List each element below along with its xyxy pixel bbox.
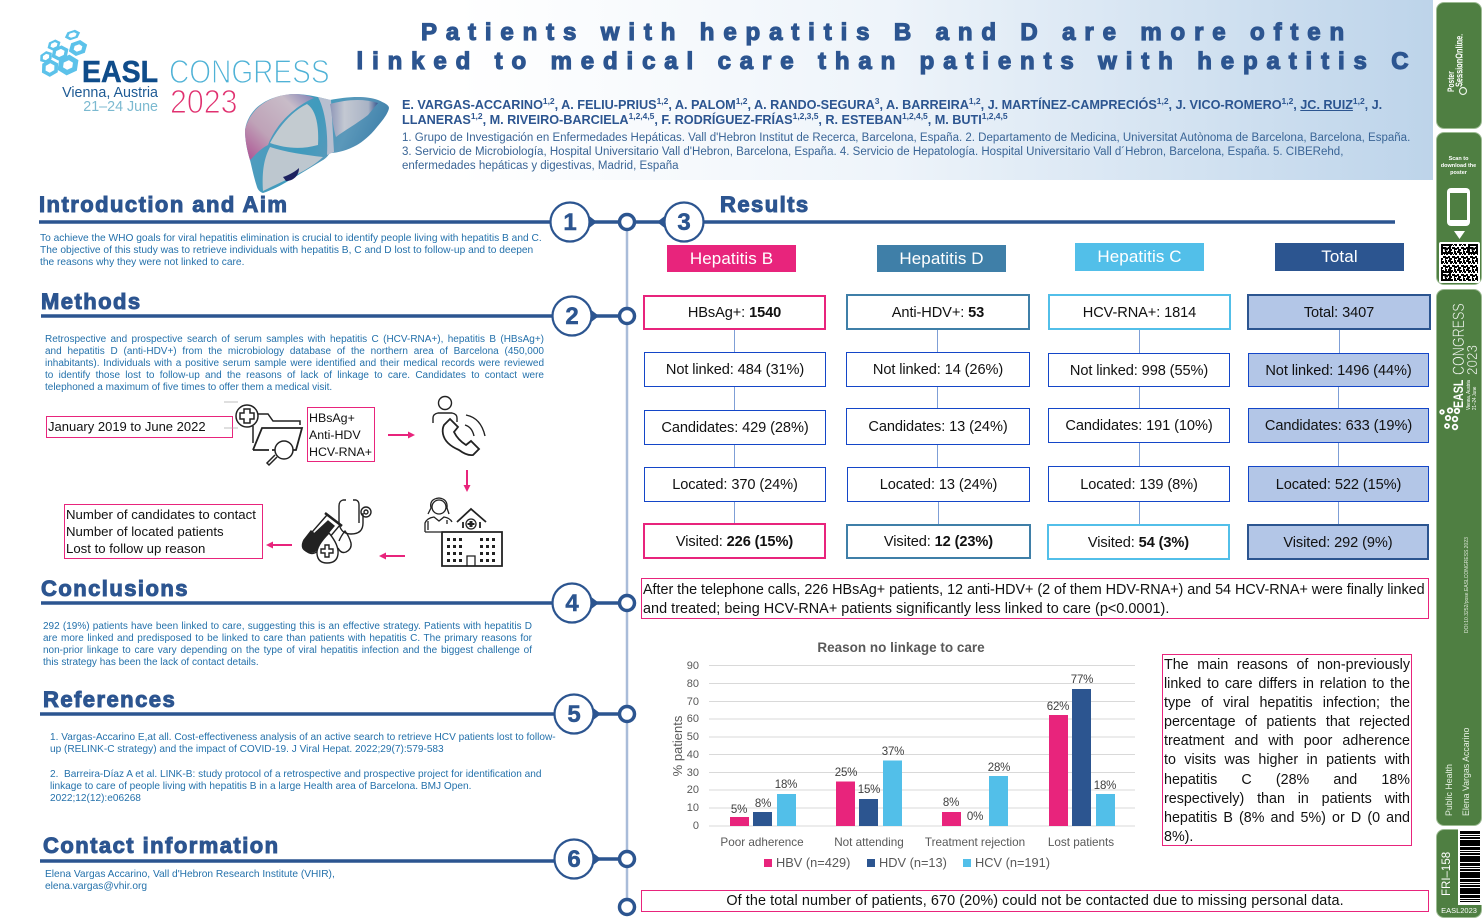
y axis labels: 0	[693, 820, 699, 832]
data labels: 77%	[1071, 674, 1093, 686]
bars: HCV	[777, 760, 1115, 826]
text: conclusions: are more linked and predisposed to be linked to care than patients with hepatitis C. The primary reasons for	[43, 633, 532, 644]
text: methods: and hepatitis D (anti-HDV+) from the microbiology database of the northern area of Barcelona (450,000	[45, 346, 544, 357]
icon: medical folder with magnifier	[224, 402, 304, 466]
authors	[402, 96, 1382, 127]
callout: main reasons: hepatitis B (8% and 5%) or D (0 and	[1164, 810, 1410, 826]
box: collected outcomes: Number of located patients	[66, 524, 224, 539]
heading: introduction: Introduction and Aim	[39, 192, 288, 217]
box: candidates	[1248, 408, 1429, 443]
data labels: 25%	[835, 767, 857, 779]
arrow: to results box	[266, 542, 292, 548]
title: linked to medical care than patients with hepatitis C	[357, 48, 1417, 75]
text: contact details	[45, 869, 335, 892]
callout: main reasons: treatment and with poor adherence	[1164, 733, 1410, 749]
box: anti-HDV positive	[846, 294, 1030, 330]
legend	[764, 855, 1050, 870]
data labels: 28%	[988, 762, 1010, 774]
logo location	[62, 85, 158, 115]
panel: introduction and aim	[39, 192, 542, 268]
sidebar text: poster: Poster	[1446, 71, 1456, 92]
box: collected outcomes	[64, 504, 263, 559]
box: total: Total: 3407	[1304, 304, 1374, 320]
y axis labels: 50	[687, 731, 699, 743]
data labels: 18%	[775, 779, 797, 791]
box: candidates	[1048, 408, 1230, 443]
data labels: 8%	[755, 798, 771, 810]
sidebar year: 2023	[1464, 344, 1480, 374]
text: introduction: the reasons why they were not linked to care.	[40, 257, 244, 268]
text: introduction	[40, 233, 542, 268]
y axis labels: 40	[687, 749, 699, 761]
timeline: rules, connector and nodes: 2	[565, 303, 579, 330]
callout: main reasons: hepatitis C (28% and 18%	[1164, 772, 1410, 788]
sidebar EASL label: EASL	[1450, 379, 1466, 408]
box: located	[1248, 466, 1429, 502]
panel: references	[43, 687, 556, 804]
box: visited: Visited:	[1088, 534, 1135, 550]
callout: main reasons: percentage of patients that rejected	[1164, 714, 1410, 730]
sidebar author: Elena Vargas Accarino	[1461, 728, 1471, 816]
box: candidates: Candidates: 13 (24%)	[868, 419, 1008, 435]
data labels: 0%	[967, 811, 983, 823]
column: hepatitis C	[1047, 243, 1231, 560]
y axis labels: 80	[687, 678, 699, 690]
category labels	[720, 836, 1114, 849]
icon: doctor and hospital	[424, 497, 503, 567]
y axis labels: 30	[687, 767, 699, 779]
logo location: Vienna, Austria	[62, 85, 158, 101]
panel: conclusions	[41, 576, 532, 668]
box: total	[1247, 294, 1431, 330]
box: markers: Anti-HDV	[309, 428, 361, 442]
box: located: Located: 139 (8%)	[1080, 476, 1198, 492]
box: markers: HBsAg+	[309, 411, 355, 425]
y axis labels	[687, 660, 699, 832]
box: HBsAg positive: 1540	[749, 305, 781, 321]
y axis labels: 60	[687, 713, 699, 725]
box: visited	[1047, 524, 1230, 560]
bar chart: reason no linkage to care	[670, 640, 1135, 870]
text: reference list: up (RELINK-C strategy) and the impact of COVID-19. J Viral Hepat. 2022;29(7):579-583	[50, 744, 444, 755]
box: visited	[643, 523, 826, 559]
box: markers: HCV-RNA+	[309, 445, 372, 459]
box: HBsAg positive: HBsAg+:	[688, 305, 745, 321]
sidebar: poster number and barcode	[1436, 829, 1482, 918]
logo: EASL Congress 2023	[40, 30, 330, 120]
y axis title: % patients	[670, 715, 685, 776]
callout: main reasons: respectively) than in patients with	[1164, 791, 1410, 807]
callout: main reasons: type of viral hepatitis infection; the	[1164, 695, 1410, 711]
barcode	[1458, 829, 1482, 905]
data labels	[731, 674, 1116, 823]
sidebar text: scan to download: poster	[1450, 170, 1467, 176]
text: conclusions	[43, 621, 532, 668]
sidebar logo location: 21–24 June	[1472, 386, 1478, 410]
callout: main reasons: The main reasons of non-previously	[1164, 657, 1410, 673]
text: methods: telephoned a maximum of five times to offer them a medical visit.	[45, 382, 332, 393]
box: not linked: Not linked: 484 (31%)	[666, 362, 804, 378]
sidebar: congress details	[1436, 289, 1482, 826]
box: not linked	[1048, 353, 1230, 387]
sidebar conference tag: EASL2023	[1441, 906, 1477, 915]
legend: HCV (n=191)	[975, 855, 1050, 870]
sidebar poster number: FRI–158	[1441, 852, 1453, 896]
heading: references: References	[43, 687, 176, 712]
callout: missing personal data: Of the total number of patients, 670 (20%) could not be contacted due to missing personal data.	[726, 893, 1344, 909]
callout: main reasons: to visits was higher in patients with	[1164, 752, 1410, 768]
y axis labels: 20	[687, 784, 699, 796]
box: located	[847, 467, 1030, 502]
text: reference list: 2. Barreira-Díaz A et al. LINK-B: study protocol of a retrospective and prospective project for identification and	[50, 769, 541, 780]
text: methods: Retrospective and prospective search of serum samples with hepatitis C (HCV-RNA+), hepatitis B (HBsAg+)	[45, 334, 544, 345]
box: candidates: Candidates: 191 (10%)	[1065, 418, 1213, 434]
logo location: 21–24 June	[83, 99, 158, 115]
text: methods: inhabitants). Individuals with a positive serum sample were identified and their medical records were reviewed	[45, 358, 544, 369]
header: total: Total	[1321, 247, 1358, 266]
text: introduction: The objective of this study was to retrieve individuals with hepatitis B, C and D lost to follow-up and to deepen	[40, 245, 533, 256]
affiliations: enfermedades hepáticas y digestivas, Madrid, España	[402, 160, 679, 172]
box: study period	[46, 416, 233, 438]
text: conclusions: this strategy has been the lack of contact details.	[43, 657, 259, 668]
sidebar text: scan to download: download the	[1441, 163, 1476, 169]
box: visited: Visited:	[884, 534, 931, 550]
icon: session line and gear	[1458, 34, 1468, 96]
text: reference list: 2022;12(12):e06268	[50, 793, 141, 804]
box: HBsAg positive	[643, 295, 826, 330]
authors: E. VARGAS-ACCARINO1,2, A. FELIU-PRIUS1,2, A. PALOM1,2, A. RANDO-SEGURA3, A. BARREIRA1,2, J. MARTÍNEZ-CAMPRECIÓS1,2, J. VICO-ROMERO1,2, JC. RUIZ1,2, J.	[402, 96, 1382, 112]
barcode bars	[1460, 831, 1480, 902]
authors: LLANERAS1,2, M. RIVEIRO-BARCIELA1,2,4,5, F. RODRÍGUEZ-FRÍAS1,2,3,5, R. ESTEBAN1,2,4,5, M. BUTI1,2,4,5	[402, 111, 1008, 127]
column: hepatitis B	[643, 245, 826, 559]
panel: methods	[41, 289, 544, 393]
box: visited	[846, 524, 1031, 559]
box: HCV-RNA positive	[1048, 294, 1231, 330]
text: contact details: Elena Vargas Accarino, Vall d'Hebron Research Institute (VHIR),	[45, 869, 335, 880]
box: candidates: Candidates: 429 (28%)	[661, 420, 809, 436]
arrow: to lab tests	[379, 552, 405, 560]
sidebar: poster session online	[1436, 2, 1482, 129]
box: located	[1048, 466, 1230, 502]
box: visited: 54 (3%)	[1139, 534, 1189, 550]
box: anti-HDV positive: 53	[968, 304, 984, 320]
text: reference list: 1. Vargas-Accarino E,at all. Cost-effectiveness analysis of an active search to retrieve HCV patients lost to follow-	[50, 732, 556, 743]
header: hepatitis C	[1075, 243, 1204, 271]
box: visited	[1247, 524, 1429, 560]
affiliations: 1. Grupo de Investigación en Enfermedades Hepáticas. Vall d'Hebron Institut de Recerca, Barcelona, España. 2. Departamento de Medicina, Universitat Autònoma de Barcelona, Barcelona, España.	[402, 132, 1410, 144]
header: total	[1275, 243, 1404, 271]
timeline: rules, connector and nodes: 1	[563, 209, 577, 236]
header: hepatitis B: Hepatitis B	[690, 248, 773, 268]
y axis labels: 90	[687, 660, 699, 672]
text: introduction: To achieve the WHO goals for viral hepatitis elimination is crucial to identify people living with hepatitis B and C.	[40, 233, 542, 244]
legend: HBV (n=429)	[776, 855, 850, 870]
box: not linked	[644, 352, 826, 387]
affiliations: 3. Servicio de Microbiología, Hospital Universitario Vall d'Hebron, Barcelona, España. 4. Servicio de Hepatología. Hospital Universitario Vall d´Hebron, Barcelona, España. 5. CIBERehd,	[402, 146, 1343, 158]
data labels: 37%	[882, 746, 904, 758]
timeline: rules, connector and nodes: 4	[565, 590, 579, 617]
data labels: 18%	[1094, 780, 1116, 792]
box: visited: 226 (15%)	[727, 534, 793, 550]
header: hepatitis D	[877, 245, 1006, 272]
chart title: Reason no linkage to care	[817, 640, 985, 655]
box: markers	[307, 407, 375, 462]
heading: methods: Methods	[41, 289, 142, 314]
text: reference list	[50, 732, 556, 804]
box: HCV-RNA positive: HCV-RNA+: 1814	[1083, 304, 1196, 320]
box: anti-HDV positive: Anti-HDV+:	[892, 304, 964, 320]
box: candidates	[846, 408, 1030, 445]
sidebar text: scan to download	[1441, 156, 1476, 176]
callout: telephone outcome: and treated; being HCV-RNA+ patients significantly less linked to care (p<0.0001).	[643, 601, 1169, 617]
sidebar hexagons	[1439, 407, 1460, 430]
text: reference list: linkage to care of people living with hepatitis B in a large Health area of Barcelona. BMJ Open.	[50, 781, 471, 792]
data labels: 15%	[858, 784, 880, 796]
callout: telephone outcome	[641, 578, 1429, 619]
box: candidates: Candidates: 633 (19%)	[1265, 418, 1412, 434]
callout: missing personal data	[641, 890, 1429, 912]
legend: HDV (n=13)	[879, 855, 947, 870]
bars: HDV	[753, 689, 1091, 826]
box: located: Located: 370 (24%)	[672, 477, 798, 493]
box: visited: Visited:	[676, 534, 723, 550]
sidebar: QR download	[1436, 132, 1482, 285]
heading: contact information: Contact information	[43, 833, 280, 858]
header: hepatitis B	[667, 245, 796, 272]
callout: main reasons	[1162, 654, 1412, 846]
header gradient band	[0, 0, 1433, 180]
header: hepatitis C: Hepatitis C	[1097, 247, 1182, 266]
box: visited: Visited: 292 (9%)	[1283, 534, 1393, 550]
logo word CONGRESS: CONGRESS	[169, 53, 330, 90]
box: collected outcomes: Lost to follow up reason	[66, 541, 205, 556]
sidebar text: session online: SessionOnline	[1454, 35, 1464, 86]
sidebar text: scan to download: Scan to	[1449, 156, 1468, 162]
box: not linked: Not linked: 14 (26%)	[873, 362, 1003, 378]
arrow: to phone	[388, 432, 415, 438]
callout: main reasons: 8%).	[1164, 829, 1193, 845]
panel: contact information	[43, 833, 335, 892]
box: located	[644, 467, 826, 502]
icon: hexagon cluster	[40, 30, 88, 77]
category labels: Treatment rejection	[925, 836, 1025, 849]
timeline: rules, connector and nodes: 6	[567, 846, 581, 873]
box: not linked	[846, 352, 1030, 387]
box: study period: January 2019 to June 2022	[48, 419, 206, 434]
logo year: 2023	[170, 83, 238, 120]
sidebar logo location	[1466, 379, 1478, 410]
data labels: 62%	[1047, 701, 1069, 713]
sidebar DOI: DOI:10.3252/pose.EASLCONGRESS.2023	[1464, 537, 1470, 633]
box: not linked: Not linked: 1496 (44%)	[1265, 362, 1412, 378]
box: not linked	[1248, 353, 1429, 387]
header: hepatitis D: Hepatitis D	[899, 248, 984, 268]
icon: person with telephone	[432, 396, 486, 456]
title: Patients with hepatitis B and D are more often	[421, 19, 1353, 46]
text: methods	[45, 334, 544, 393]
icon: test tube, stethoscope and drops	[302, 499, 372, 564]
logo word EASL: EASL	[82, 54, 158, 89]
affiliations	[402, 132, 1410, 172]
text: contact details: elena.vargas@vhir.org	[45, 881, 147, 892]
text: conclusions: 292 (19%) patients have been linked to care, suggesting this is an effective strategy. Patients with hepatitis D	[43, 621, 532, 632]
icon: liver	[245, 94, 389, 193]
sidebar congress word: CONGRESS	[1450, 303, 1468, 374]
category labels: Lost patients	[1048, 836, 1114, 849]
box: located: Located: 522 (15%)	[1276, 476, 1401, 492]
y axis labels: 70	[687, 696, 699, 708]
box: located: Located: 13 (24%)	[880, 477, 997, 493]
column: hepatitis D	[846, 245, 1031, 559]
box: collected outcomes: Number of candidates to contact	[66, 507, 256, 522]
callout: main reasons: linked to care differs in relation to the	[1164, 676, 1410, 692]
flow diagram: methods workflow	[46, 396, 503, 567]
heading: conclusions: Conclusions	[41, 576, 189, 601]
arrow: to hospital	[464, 470, 470, 492]
bars: HBV	[730, 715, 1068, 826]
icon: QR code	[1439, 242, 1480, 283]
y axis labels: 10	[687, 802, 699, 814]
category labels: Not attending	[834, 836, 904, 849]
sidebar category: Public Health	[1444, 764, 1454, 816]
box: not linked: Not linked: 998 (55%)	[1070, 362, 1208, 378]
timeline: rules, connector and nodes: 5	[567, 701, 581, 728]
box: candidates	[644, 410, 826, 445]
icon: smartphone	[1447, 188, 1470, 239]
title	[357, 19, 1417, 75]
box: visited: 12 (23%)	[935, 534, 993, 550]
data labels: 8%	[943, 797, 959, 809]
timeline: rules, connector and nodes: 3	[677, 209, 691, 236]
sidebar logo location: Vienna, Austria	[1466, 379, 1472, 410]
category labels: Poor adherence	[720, 836, 804, 849]
callout: telephone outcome: After the telephone calls, 226 HBsAg+ patients, 12 anti-HDV+ (2 of them HDV-RNA+) and 54 HCV-RNA+ were finally linked	[643, 582, 1425, 598]
column: total	[1247, 243, 1431, 560]
heading: results: Results	[720, 192, 810, 217]
text: methods: to identify those lost to follow-up and the reasons of lack of linkage to care. Candidates to contact were	[45, 370, 544, 381]
text: conclusions: non-prior linkage to care vary depending on the type of viral hepatitis infection and the biggest challenge of	[43, 645, 532, 656]
data labels: 5%	[731, 804, 747, 816]
